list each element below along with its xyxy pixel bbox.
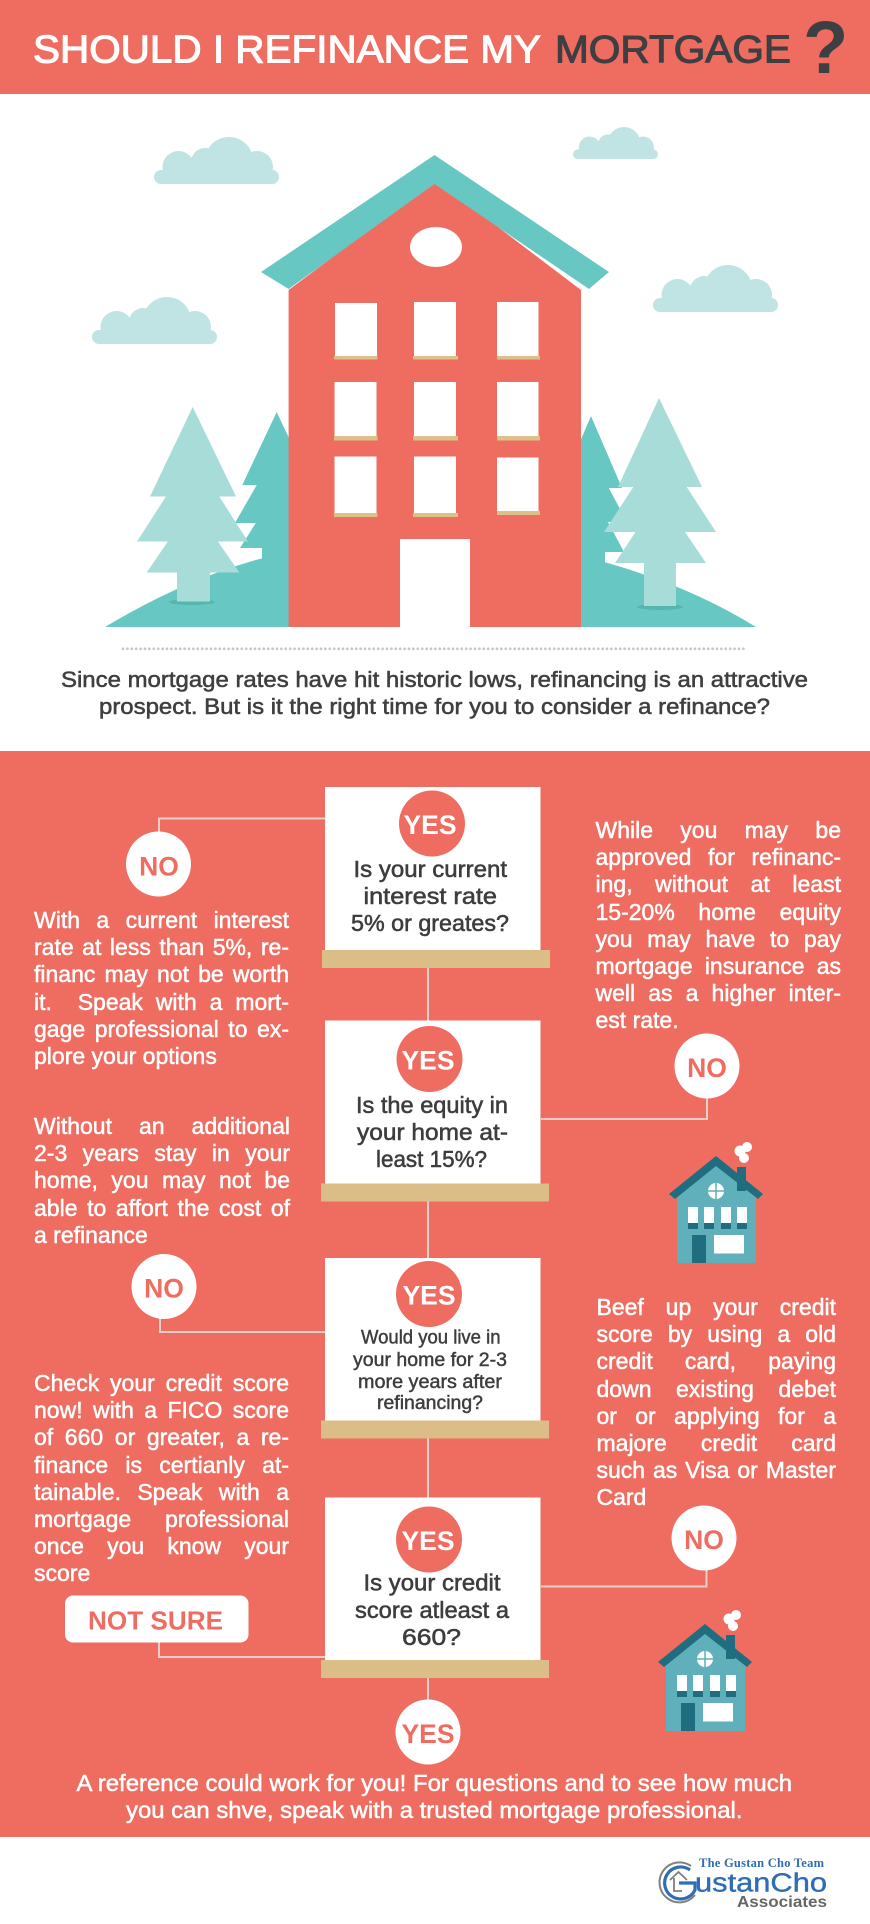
badge: no, equity: NO bbox=[687, 1053, 727, 1083]
text block: check credit score: now! with a FICO score bbox=[34, 1397, 289, 1423]
text block: low interest rate: it. Speak with a mort- bbox=[34, 989, 289, 1015]
closing text bbox=[76, 1770, 792, 1823]
title bbox=[33, 28, 791, 72]
question text bbox=[351, 856, 509, 936]
front trees bbox=[137, 398, 716, 610]
text block: home equity: approved for refinanc- bbox=[596, 844, 841, 870]
question text: Is the equity in bbox=[356, 1092, 508, 1118]
icon: small house, lower bbox=[658, 1610, 752, 1731]
badge: no, credit score bbox=[672, 1506, 736, 1570]
badge: not sure bbox=[65, 1596, 248, 1642]
text block: check credit score: Check your credit score bbox=[34, 1370, 289, 1396]
text block: beef up credit: Card bbox=[596, 1484, 646, 1510]
badge: not sure: NOT SURE bbox=[88, 1606, 223, 1636]
text block: length of stay: home, you may not be bbox=[34, 1167, 290, 1193]
text block: beef up credit: down existing debet bbox=[596, 1376, 836, 1402]
text block: beef up credit: Beef up your credit bbox=[596, 1294, 836, 1320]
logo: Associates bbox=[737, 1894, 827, 1911]
text block: home equity: 15-20% home equity bbox=[596, 899, 841, 925]
badge: yes: YES bbox=[403, 810, 457, 840]
question text: interest rate bbox=[364, 883, 497, 909]
badge: final yes bbox=[396, 1700, 460, 1764]
house bbox=[261, 155, 609, 627]
text block: check credit score bbox=[34, 1370, 290, 1586]
logo wordmark: The Gustan Cho Team bbox=[699, 1856, 825, 1870]
logo mark bbox=[659, 1862, 695, 1902]
text block: home equity: ing, without at least bbox=[596, 871, 841, 897]
badge: yes: YES bbox=[402, 1280, 456, 1310]
text block: low interest rate: gage professional to ex- bbox=[34, 1016, 289, 1042]
text block: home equity: you may have to pay bbox=[596, 926, 841, 952]
text block: check credit score: finance is certianly at- bbox=[34, 1452, 289, 1478]
question text: Would you live in bbox=[361, 1328, 500, 1348]
question text: score atleast a bbox=[355, 1597, 509, 1623]
question text: refinancing? bbox=[377, 1393, 483, 1414]
badge: no, interest rate: NO bbox=[139, 852, 179, 882]
intro text: Since mortgage rates have hit historic lows, refinancing is an attractive bbox=[61, 667, 808, 692]
intro text bbox=[61, 667, 808, 719]
icon: question mark: ? bbox=[803, 6, 848, 89]
logo: ustanCho bbox=[695, 1870, 827, 1898]
text block: check credit score: mortgage professional bbox=[34, 1506, 289, 1532]
title: SHOULD I REFINANCE MY bbox=[33, 28, 541, 72]
panel: question 3 bbox=[321, 1258, 549, 1438]
badge: yes bbox=[396, 1261, 462, 1327]
badge: yes bbox=[399, 790, 465, 856]
badge: yes: YES bbox=[401, 1046, 455, 1076]
panel: question 2 bbox=[321, 1020, 549, 1202]
divider dots bbox=[123, 647, 746, 650]
badge: no, stay bbox=[132, 1254, 196, 1319]
text block: beef up credit: such as Visa or Master bbox=[596, 1457, 836, 1483]
question text: least 15%? bbox=[376, 1146, 487, 1172]
text block: beef up credit: score by using a old bbox=[596, 1321, 836, 1347]
text block: length of stay: Without an additional bbox=[34, 1113, 290, 1139]
text block: check credit score: once you know your bbox=[34, 1533, 289, 1559]
connectors bbox=[159, 818, 707, 1702]
closing text: A reference could work for you! For questions and to see how much bbox=[76, 1770, 792, 1796]
text block: length of stay bbox=[34, 1113, 290, 1248]
panel: question 4 bbox=[321, 1498, 549, 1678]
question text: 660? bbox=[402, 1624, 461, 1650]
question text: Is your current bbox=[354, 856, 508, 882]
question text bbox=[353, 1328, 507, 1414]
badge: no, stay: NO bbox=[144, 1274, 184, 1304]
intro text: prospect. But is it the right time for you to consider a refinance? bbox=[99, 694, 770, 719]
question text bbox=[356, 1092, 508, 1172]
text block: beef up credit: majore credit card bbox=[596, 1430, 836, 1456]
text block: home equity: est rate. bbox=[596, 1007, 679, 1033]
text block: length of stay: able to affort the cost of bbox=[34, 1195, 290, 1221]
question text: your home at- bbox=[357, 1119, 508, 1145]
panel: flowchart background bbox=[0, 751, 870, 1837]
back trees and hill bbox=[105, 412, 756, 627]
text block: check credit score: of 660 or greater, a re- bbox=[34, 1424, 289, 1450]
badge: no, equity bbox=[674, 1034, 740, 1098]
illustration: house scene bbox=[92, 127, 778, 627]
badge: final yes: YES bbox=[401, 1719, 455, 1749]
text block: home equity: mortgage insurance as bbox=[596, 953, 841, 979]
question text bbox=[355, 1570, 509, 1650]
badge: yes bbox=[396, 1026, 462, 1092]
text block: home equity: While you may be bbox=[596, 817, 841, 843]
text block: beef up credit: or or applying for a bbox=[596, 1403, 836, 1429]
text block: home equity: well as a higher inter- bbox=[596, 980, 841, 1006]
closing text: you can shve, speak with a trusted mortgage professional. bbox=[126, 1797, 742, 1823]
text block: low interest rate bbox=[34, 907, 290, 1070]
text block: low interest rate: rate at less than 5%, re- bbox=[34, 934, 289, 960]
text block: beef up credit: credit card, paying bbox=[596, 1348, 836, 1374]
title: MORTGAGE bbox=[555, 28, 791, 72]
badge: yes: YES bbox=[401, 1526, 455, 1556]
text block: length of stay: 2-3 years stay in your bbox=[34, 1140, 290, 1166]
header banner bbox=[0, 0, 870, 94]
badge: no, credit score: NO bbox=[684, 1525, 724, 1555]
clouds bbox=[92, 127, 778, 344]
panel: question 1 bbox=[322, 787, 550, 968]
badge: no, interest rate bbox=[126, 832, 191, 896]
text block: low interest rate: plore your options bbox=[34, 1043, 217, 1069]
text block: check credit score: tainable. Speak with a bbox=[34, 1479, 289, 1505]
question text: more years after bbox=[358, 1372, 503, 1393]
logo bbox=[659, 1856, 827, 1911]
text block: low interest rate: financ may not be worth bbox=[34, 961, 289, 987]
question text: your home for 2-3 bbox=[353, 1350, 507, 1371]
text block: home equity bbox=[595, 817, 842, 1033]
question text: 5% or greates? bbox=[351, 910, 509, 936]
text block: check credit score: score bbox=[34, 1560, 90, 1586]
text block: beef up credit bbox=[596, 1294, 836, 1510]
text block: length of stay: a refinance bbox=[34, 1222, 148, 1248]
text block: low interest rate: With a current interest bbox=[34, 907, 289, 933]
question text: Is your credit bbox=[364, 1570, 501, 1596]
icon: small house, upper bbox=[669, 1142, 763, 1263]
badge: yes bbox=[396, 1506, 462, 1572]
